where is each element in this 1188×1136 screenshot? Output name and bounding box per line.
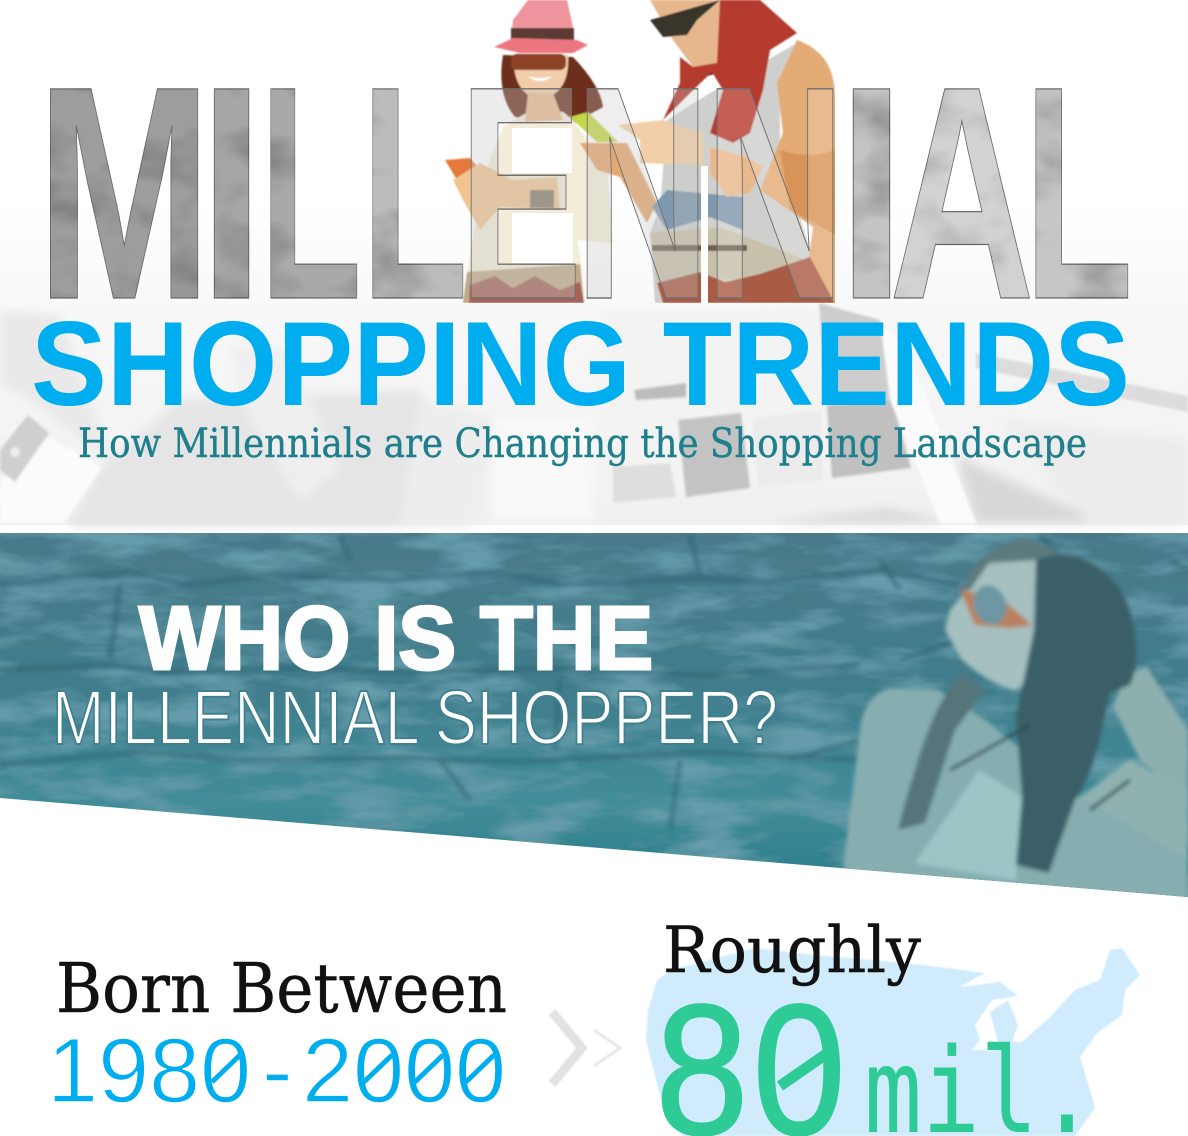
label: born between: Born Between: [56, 950, 507, 1029]
title: MILLENNIAL: E: [459, 24, 582, 363]
woman right: [618, 0, 836, 303]
title: MILLENNIAL: I: [198, 24, 265, 364]
arrow: chevrons: [552, 1012, 620, 1084]
title: MILLENNIAL: N: [704, 24, 846, 363]
brick joints: [0, 535, 1188, 830]
title: MILLENNIAL: N: [575, 23, 710, 363]
title: MILLENNIAL: A: [889, 22, 1035, 363]
map: United States: [646, 948, 1140, 1136]
photo: two women with phones: [445, 0, 836, 303]
white counters and gaps of letters: [512, 128, 708, 303]
title: MILLENNIAL: L: [361, 23, 468, 363]
stat: 1980-2000: 1980-2000: [47, 1020, 506, 1122]
subtitle: How Millennials are Changing the Shopping Landscape: [78, 421, 1087, 467]
title: MILLENNIAL: [36, 22, 1133, 364]
title: MILLENNIAL: L: [260, 24, 362, 364]
title: SHOPPING TRENDS: SHOPPING TRENDS: [31, 297, 1130, 431]
heading: WHO IS THE: WHO IS THE: [139, 589, 653, 689]
woman left: [445, 0, 657, 303]
header watermark background: [0, 200, 1188, 527]
title: MILLENNIAL: L: [1024, 23, 1133, 363]
label: roughly: Roughly: [663, 914, 921, 988]
heading: MILLENNIAL SHOPPER?: MILLENNIAL SHOPPER?: [52, 675, 778, 761]
teal brick background: [0, 533, 1188, 897]
panel: who is the millennial shopper: [0, 533, 1188, 900]
title: MILLENNIAL: M: [36, 24, 212, 363]
photo: woman with sunglasses: [844, 540, 1188, 900]
title: MILLENNIAL: I: [836, 24, 907, 363]
